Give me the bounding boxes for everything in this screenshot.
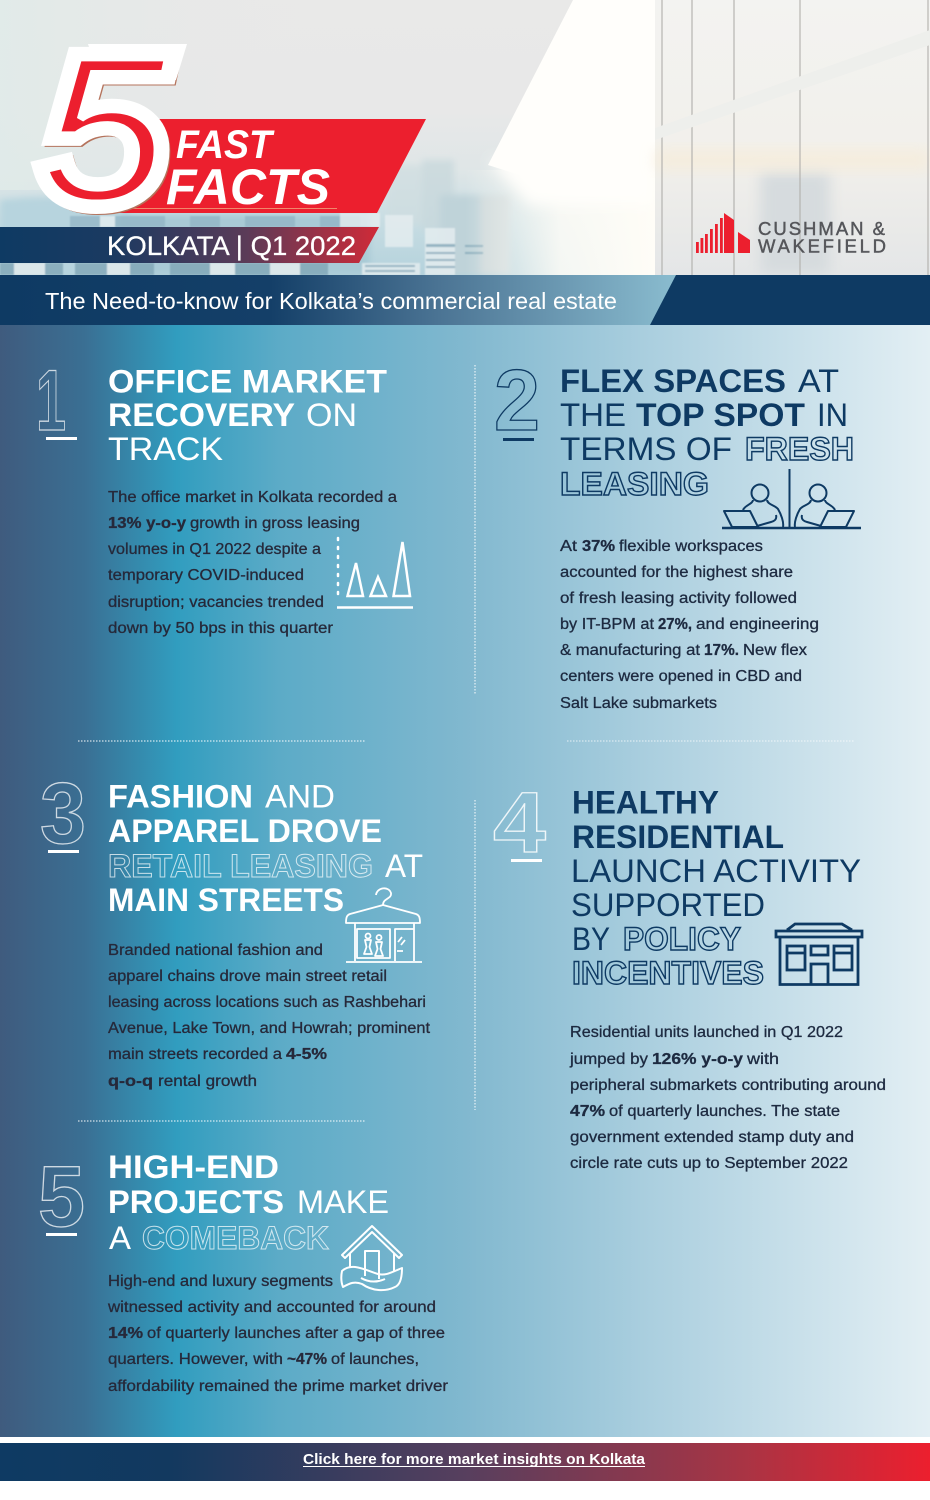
body text 1: growth in gross leasing: [190, 515, 360, 532]
icon: storefront building: [776, 924, 862, 984]
body text 2: accounted for the highest share: [560, 564, 793, 581]
panel: fact 3 fashion retail: [40, 766, 431, 1090]
body text 3: Avenue, Lake Town, and Howrah; prominent: [108, 1020, 431, 1037]
heading 2: THE: [560, 397, 626, 433]
heading 2: LEASING: [560, 466, 709, 502]
big number 5: 5: [42, 16, 171, 248]
heading 4: HEALTHY: [572, 784, 719, 820]
heading 4: SUPPORTED: [571, 887, 765, 923]
body text 3: [108, 942, 431, 1090]
body text 1: The office market in Kolkata recorded a: [108, 489, 397, 506]
banner title: fast facts: FACTS: [166, 159, 330, 215]
body text 2: 27%,: [658, 616, 692, 633]
heading 4: LAUNCH ACTIVITY: [571, 853, 861, 889]
body text 3: main streets recorded a: [108, 1046, 282, 1063]
header photo: city skyline through window: [0, 0, 930, 275]
body text 2: New flex: [743, 642, 807, 659]
logo: Cushman and Wakefield: CUSHMAN &: [758, 218, 886, 239]
body text 3: Branded national fashion and: [108, 942, 323, 959]
thin rule under banner: [120, 208, 337, 209]
footer link bar: Click here for more market insights on Kolkata: [303, 1451, 646, 1468]
panel: fact 2 flex spaces: [494, 353, 861, 712]
body text 2: & manufacturing at: [560, 642, 701, 659]
body text 2: of fresh leasing activity followed: [560, 590, 797, 607]
banner title: fast facts: [166, 123, 330, 215]
body text 5: High-end and luxury segments: [108, 1273, 333, 1290]
heading 2: FRESH: [745, 431, 854, 467]
icon: hanger storefront: [346, 888, 422, 962]
body text 4: 47%: [570, 1103, 605, 1120]
heading 5: COMEBACK: [142, 1220, 330, 1256]
body text 2: [560, 538, 819, 712]
body text 4: [569, 1024, 886, 1172]
heading 3: AT: [385, 848, 423, 884]
vertical dotted dividers: [78, 365, 855, 1121]
heading 4: RESIDENTIAL: [572, 819, 784, 855]
heading 4: INCENTIVES: [572, 955, 764, 991]
numeral 5: 5: [38, 1149, 85, 1245]
panel: fact 1 office market: [36, 353, 413, 637]
big number 5: 5: [40, 14, 169, 246]
body text 5: of launches,: [331, 1351, 419, 1368]
body text 2: 17%.: [704, 642, 739, 659]
heading 3: [108, 778, 423, 918]
body text 4: 126% y-o-y: [652, 1051, 743, 1068]
numeral 4: 4: [493, 775, 546, 871]
heading 3: RETAIL LEASING: [108, 848, 373, 884]
city and quarter bar: KOLKATA | Q1 2022: [107, 231, 356, 261]
heading 3: MAIN STREETS: [108, 882, 344, 918]
heading 2: [560, 363, 854, 502]
body text 3: apparel chains drove main street retail: [108, 968, 387, 985]
body text 1: 13% y-o-y: [108, 515, 186, 532]
body text 4: Residential units launched in Q1 2022: [570, 1024, 843, 1041]
heading 4: POLICY: [623, 921, 741, 957]
heading 5: PROJECTS: [108, 1184, 284, 1220]
numeral 3: 3: [40, 766, 86, 862]
logo: Cushman and Wakefield: WAKEFIELD: [758, 236, 886, 256]
body text 1: temporary COVID-induced: [108, 567, 304, 584]
heading 2: FLEX SPACES: [560, 363, 786, 399]
icon: house in hand: [341, 1226, 402, 1290]
footer link bar: [0, 1443, 930, 1481]
heading 2: TOP SPOT: [636, 397, 805, 433]
body text 2: At: [560, 538, 578, 555]
heading 4: [571, 784, 861, 991]
heading 3: FASHION: [108, 778, 253, 814]
heading 1: [108, 364, 387, 467]
heading 1: TRACK: [108, 431, 223, 467]
banner title: fast facts: FAST: [176, 123, 275, 167]
big number 5: 5: [40, 14, 169, 246]
heading 3: AND: [265, 778, 335, 814]
body text 5: 14%: [108, 1325, 143, 1342]
body text 4: with: [746, 1051, 779, 1068]
body text 3: q-o-q: [108, 1073, 153, 1090]
body text 2: flexible workspaces: [619, 538, 763, 555]
body text 4: peripheral submarkets contributing around: [570, 1077, 886, 1094]
heading 2: AT: [798, 363, 839, 399]
body text 5: witnessed activity and accounted for around: [107, 1299, 436, 1316]
body text 2: 37%: [582, 538, 615, 555]
subtitle bar: The Need-to-know for Kolkata’s commercial real estate: [45, 288, 617, 314]
body text 5: [107, 1273, 448, 1395]
red banner: [110, 119, 426, 213]
logo: Cushman and Wakefield: [696, 213, 886, 256]
main gradient panel: [0, 325, 930, 1437]
heading 1: RECOVERY: [108, 397, 295, 433]
heading 4: BY: [572, 921, 610, 957]
heading 5: MAKE: [297, 1184, 389, 1220]
heading 2: IN: [817, 397, 848, 433]
body text 4: jumped by: [569, 1051, 648, 1068]
heading 5: [108, 1149, 389, 1256]
icon: two people at laptops: [722, 469, 861, 528]
body text 4: of quarterly launches. The state: [609, 1103, 840, 1120]
heading 2: TERMS OF: [560, 431, 732, 467]
icon: peaks chart: [337, 538, 413, 608]
body text 5: ~47%: [287, 1351, 327, 1368]
body text 3: rental growth: [158, 1073, 257, 1090]
numeral 2: 2: [494, 353, 540, 449]
numeral 1: 1: [36, 353, 66, 449]
city and quarter bar: [0, 227, 379, 263]
body text 4: circle rate cuts up to September 2022: [570, 1155, 848, 1172]
body text 1: volumes in Q1 2022 despite a: [108, 541, 321, 558]
body text 2: and engineering: [696, 616, 819, 633]
body text 5: affordability remained the prime market driver: [108, 1378, 448, 1395]
panel: fact 5 high-end projects: [38, 1149, 448, 1395]
body text 5: quarters. However, with: [108, 1351, 283, 1368]
heading 5: A: [109, 1220, 131, 1256]
body text 1: [108, 489, 397, 637]
body text 2: centers were opened in CBD and: [560, 668, 802, 685]
body text 4: government extended stamp duty and: [570, 1129, 854, 1146]
heading 1: ON: [306, 397, 357, 433]
body text 2: Salt Lake submarkets: [560, 695, 717, 712]
body text 3: 4-5%: [286, 1046, 327, 1063]
body text 1: down by 50 bps in this quarter: [108, 620, 333, 637]
body text 3: leasing across locations such as Rashbehari: [108, 994, 426, 1011]
heading 3: APPAREL DROVE: [108, 813, 382, 849]
subtitle bar: [0, 275, 930, 325]
panel: fact 4 residential launch: [493, 775, 886, 1172]
body text 1: disruption; vacancies trended: [108, 594, 324, 611]
heading 5: HIGH-END: [108, 1149, 279, 1185]
body text 5: of quarterly launches after a gap of three: [147, 1325, 445, 1342]
heading 1: OFFICE MARKET: [108, 364, 387, 400]
body text 2: by IT-BPM at: [560, 616, 655, 633]
